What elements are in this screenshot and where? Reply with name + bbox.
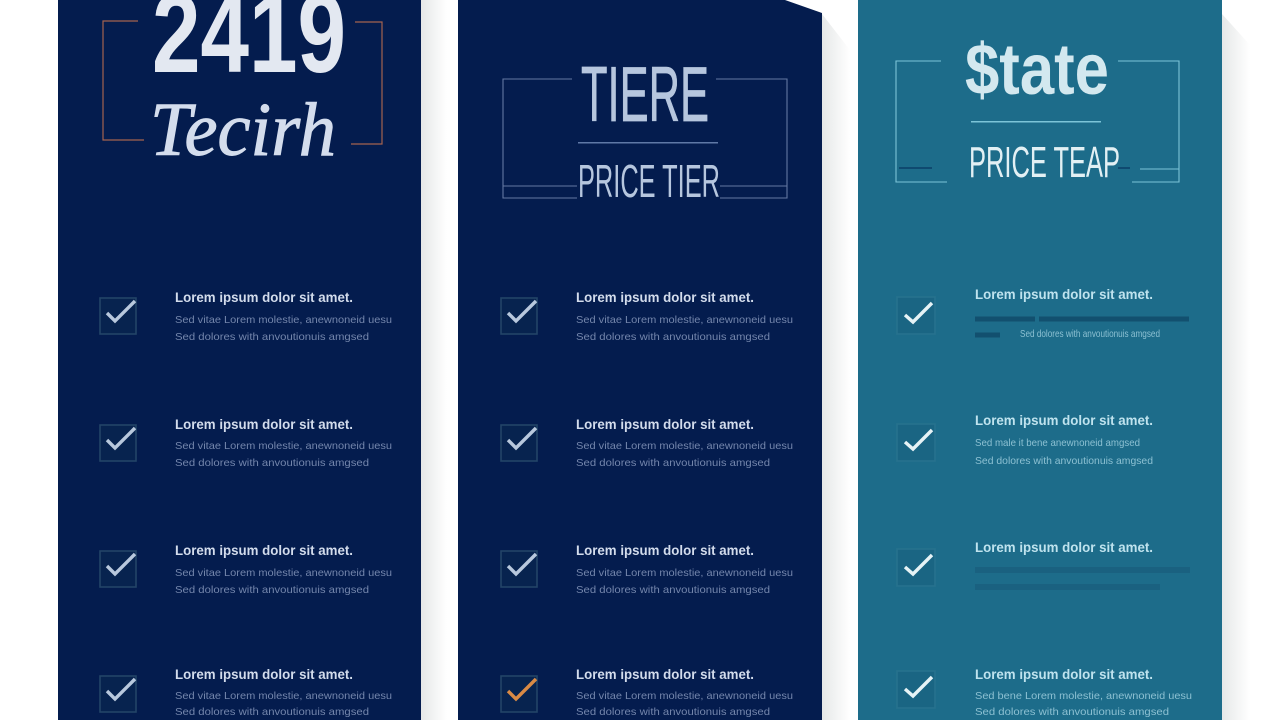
row text: Sed dolores with anvoutionuis amgsed: [576, 457, 770, 469]
row text: Sed dolores with anvoutionuis amgsed: [175, 457, 369, 469]
row text: Lorem ipsum dolor sit amet.: [975, 413, 1153, 428]
row 2: [501, 417, 793, 469]
row 1: [897, 287, 1190, 340]
heading script word: Tecirh: [150, 88, 336, 172]
icon: checkbox: [897, 549, 935, 586]
icon: checkbox orange: [501, 676, 537, 712]
icon: checkbox: [100, 298, 136, 334]
row text: [576, 290, 793, 343]
icon: checkbox: [501, 551, 537, 587]
row text: Lorem ipsum dolor sit amet.: [576, 290, 754, 305]
row text: Sed vitae Lorem molestie, anewnoneid uesu: [576, 567, 793, 579]
icon: checkbox: [897, 671, 935, 708]
row text: Sed vitae Lorem molestie, anewnoneid uesu: [175, 314, 392, 326]
icon: checkbox: [100, 676, 136, 712]
row text: Sed vitae Lorem molestie, anewnoneid uesu: [175, 567, 392, 579]
row 3: [100, 543, 392, 596]
icon: checkbox: [897, 424, 935, 461]
panel: middle tier: [458, 0, 822, 720]
icon: checkbox: [100, 551, 136, 587]
row text: [175, 543, 392, 596]
row text: Lorem ipsum dolor sit amet.: [175, 417, 353, 432]
row text: Lorem ipsum dolor sit amet.: [175, 543, 353, 558]
row text: Sed dolores with anvoutionuis amgsed: [175, 706, 369, 718]
row 3: [897, 540, 1190, 587]
row text: Sed dolores with anvoutionuis amgsed: [975, 706, 1169, 718]
panel: left tier: [58, 0, 421, 720]
row 1: [501, 290, 793, 343]
row text: Sed dolores with anvoutionuis amgsed: [975, 455, 1153, 467]
row text: [576, 667, 793, 718]
icon: checkbox: [501, 298, 537, 334]
divider under heading: [578, 142, 718, 144]
heading frame: orange bracket: [103, 21, 382, 144]
row text: Sed male it bene anewnoneid amgsed: [975, 437, 1140, 449]
row text: Sed dolores with anvoutionuis amgsed: [1020, 328, 1160, 340]
row 1: [100, 290, 392, 343]
row text: Lorem ipsum dolor sit amet.: [175, 290, 353, 305]
row text: Lorem ipsum dolor sit amet.: [975, 540, 1153, 555]
icon: checkbox: [501, 425, 537, 461]
row text: Sed dolores with anvoutionuis amgsed: [576, 584, 770, 596]
heading word: TIERE: [581, 50, 709, 138]
row text: [576, 417, 793, 469]
heading frame: [503, 79, 787, 198]
row text: [175, 290, 392, 343]
smudged body lines: [975, 570, 1190, 587]
row text: [975, 287, 1190, 340]
panel: right tier: [858, 0, 1222, 720]
row text: [576, 543, 793, 596]
row text: [975, 667, 1192, 718]
row text: Sed vitae Lorem molestie, anewnoneid uesu: [175, 690, 392, 702]
row text: [975, 540, 1190, 587]
icon: checkbox: [100, 425, 136, 461]
row text: Lorem ipsum dolor sit amet.: [175, 667, 353, 682]
heading word: $tate: [965, 30, 1109, 110]
row 2: [897, 413, 1153, 467]
row text: Sed vitae Lorem molestie, anewnoneid uesu: [576, 690, 793, 702]
divider under heading: [971, 121, 1101, 122]
row text: Sed dolores with anvoutionuis amgsed: [576, 331, 770, 343]
row text: Sed dolores with anvoutionuis amgsed: [576, 706, 770, 718]
smudged body lines: [975, 319, 1190, 335]
row text: Sed dolores with anvoutionuis amgsed: [175, 331, 369, 343]
row 4: [501, 667, 793, 718]
row text: Lorem ipsum dolor sit amet.: [576, 417, 754, 432]
panel shadows: [421, 0, 1250, 720]
row text: Sed dolores with anvoutionuis amgsed: [175, 584, 369, 596]
subheading: PRICE TEAP: [969, 138, 1120, 187]
row text: Lorem ipsum dolor sit amet.: [975, 667, 1153, 682]
row 4: [100, 667, 392, 718]
row text: Lorem ipsum dolor sit amet.: [576, 667, 754, 682]
row text: [175, 667, 392, 718]
row text: Sed vitae Lorem molestie, anewnoneid uesu: [576, 314, 793, 326]
subheading: PRICE TIER: [578, 155, 720, 207]
heading frame: [896, 61, 1179, 182]
row 4: [897, 667, 1192, 718]
icon: checkbox: [897, 297, 935, 334]
row text: [175, 417, 392, 469]
smudge marks on frame: [899, 167, 1130, 169]
row 3: [501, 543, 793, 596]
row text: Sed vitae Lorem molestie, anewnoneid uesu: [576, 440, 793, 452]
row text: Lorem ipsum dolor sit amet.: [975, 287, 1153, 302]
row text: Sed vitae Lorem molestie, anewnoneid uesu: [175, 440, 392, 452]
row text: Sed bene Lorem molestie, anewnoneid uesu: [975, 690, 1192, 702]
row text: Lorem ipsum dolor sit amet.: [576, 543, 754, 558]
row text: [975, 413, 1153, 467]
row 2: [100, 417, 392, 469]
